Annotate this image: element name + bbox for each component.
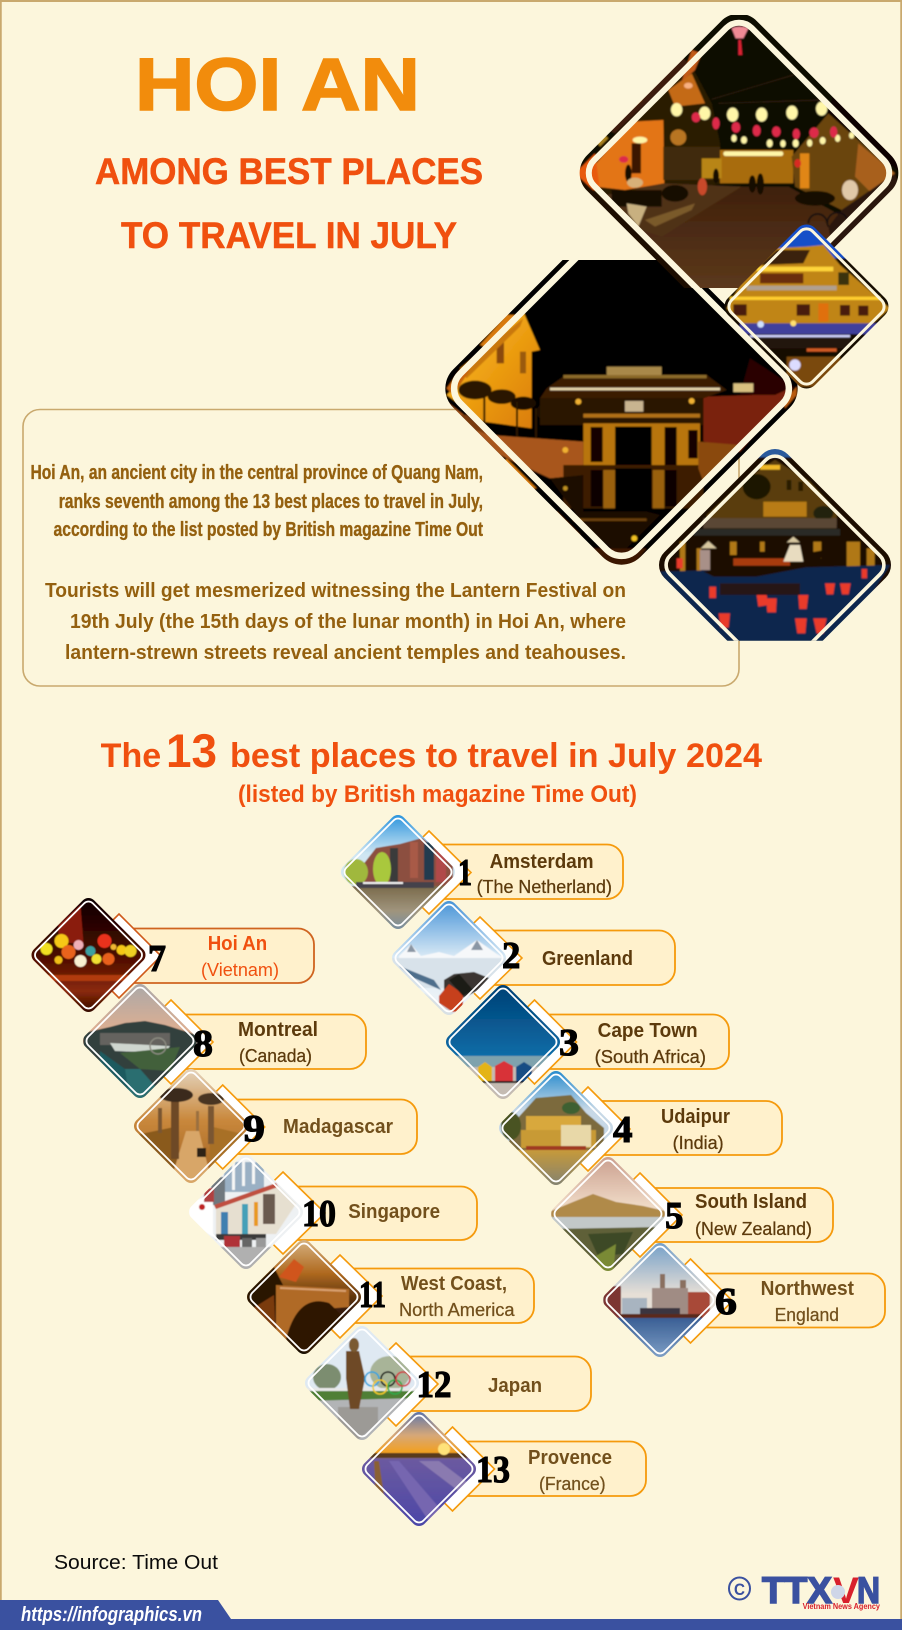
- photo: Montreal skyline: [80, 981, 200, 1101]
- label box: [530, 1014, 729, 1069]
- rank number: 5: [665, 1195, 684, 1237]
- logo: TTXVN Vietnam News Agency: N: [857, 1570, 880, 1611]
- country: (South Africa): [595, 1047, 706, 1067]
- copyright mark: [729, 1578, 750, 1600]
- item 3: Cape Town: [443, 982, 729, 1107]
- section heading: best places to travel in July 2024: [230, 737, 762, 775]
- label box: [635, 1188, 833, 1242]
- rank number: 3: [559, 1022, 579, 1064]
- photo: Cape Town beach huts: [446, 985, 560, 1099]
- section heading: 13: [166, 724, 217, 777]
- photo: statue and Olympic rings: [302, 1323, 422, 1443]
- place name: Montreal: [238, 1019, 318, 1041]
- globe: [831, 1585, 845, 1599]
- label box: [335, 1268, 534, 1323]
- copyright mark: C: [734, 1580, 745, 1599]
- accent diamond: [181, 1085, 265, 1169]
- photo: Singapore shophouses: [186, 1152, 306, 1272]
- logo: TTXVN Vietnam News Agency: [729, 1570, 880, 1611]
- accent diamond: [298, 1255, 382, 1338]
- place name: Hoi An: [208, 933, 267, 955]
- label box: [583, 1101, 782, 1155]
- label box: [114, 928, 314, 983]
- body text: first paragraph: ranks seventh among the 13 best places to travel in July,: [59, 491, 483, 513]
- photo: Amsterdam canal: [341, 815, 455, 929]
- photo: Liverpool waterfront: [603, 1243, 716, 1357]
- accent diamond: [354, 1343, 438, 1426]
- photo: Bixby bridge: [244, 1237, 364, 1357]
- photo: Japanese covered bridge at night: [440, 255, 807, 575]
- subtitle line 1: AMONG BEST PLACES: [95, 151, 483, 192]
- item 13: Provence: [359, 1409, 646, 1529]
- item 2: Greenland: [389, 898, 675, 1018]
- region: North America: [399, 1300, 515, 1320]
- country: (Vietnam): [201, 960, 279, 980]
- item 10: Singapore: [186, 1152, 477, 1272]
- footer band: [0, 1600, 902, 1630]
- accent diamond: [598, 1173, 682, 1257]
- country: (India): [673, 1133, 724, 1153]
- title: HOI AN: HOI AN: [135, 43, 420, 126]
- item 9: Madagascar: [131, 1066, 417, 1186]
- photo: lavender field: [359, 1409, 479, 1529]
- item 11: West Coast: [244, 1237, 534, 1357]
- accent diamond: [648, 1259, 732, 1343]
- photo: lantern street at night: [580, 15, 898, 288]
- label box: [424, 844, 623, 899]
- place name: Greenland: [542, 948, 633, 970]
- region: England: [775, 1305, 839, 1325]
- footer URL: https://infographics.vn: [21, 1604, 202, 1626]
- ring: yellow building frame: [725, 225, 888, 388]
- rank number: 13: [476, 1449, 510, 1491]
- label box: [391, 1356, 591, 1411]
- item 12: Japan: [302, 1323, 591, 1443]
- rank number: 11: [359, 1274, 386, 1316]
- section heading: [101, 724, 762, 808]
- panel: intro text box: [23, 410, 739, 686]
- rank number: 1: [458, 852, 472, 894]
- agency name: Vietnam News Agency: [803, 1601, 880, 1611]
- place name: Japan: [488, 1375, 542, 1397]
- rank number: 10: [302, 1193, 336, 1235]
- body text: first paragraph: according to the list posted by British magazine Time Out: [54, 519, 483, 541]
- item 7: Hoi An: [28, 895, 314, 1015]
- accent diamond: [129, 1000, 213, 1084]
- place name: Udaipur: [661, 1106, 730, 1128]
- photo: baobab trees: [134, 1069, 247, 1183]
- rank number: 8: [193, 1023, 213, 1065]
- item 1: Amsterdam: [338, 812, 623, 936]
- photo: Greenland coast: [389, 898, 509, 1018]
- rank number: 9: [243, 1108, 265, 1150]
- label box: [686, 1274, 885, 1328]
- place name: Cape Town: [598, 1020, 698, 1042]
- rank number: 7: [148, 938, 166, 980]
- ring: bridge photo frame: [450, 260, 792, 560]
- place name: Northwest: [761, 1278, 854, 1300]
- accent diamond: [492, 1000, 576, 1084]
- label box: [448, 1442, 646, 1496]
- rank number: 12: [416, 1364, 452, 1406]
- label box: [218, 1100, 417, 1154]
- source note: Source: Time Out: [54, 1551, 218, 1574]
- body text: second paragraph: Tourists will get mesmerized witnessing the Lantern Festival on: [45, 580, 626, 602]
- photo: Udaipur palace: [499, 1071, 613, 1185]
- accent diamond: [241, 1172, 325, 1254]
- place name: Amsterdam: [490, 851, 594, 873]
- body text: second paragraph: 19th July (the 15th days of the lunar month) in Hoi An, where: [70, 611, 626, 633]
- country: (The Netherland): [477, 877, 612, 897]
- label box: [166, 1014, 366, 1069]
- rank number: 4: [613, 1109, 632, 1151]
- photo: lanterns: [28, 895, 148, 1015]
- place name: Provence: [528, 1447, 612, 1469]
- place name: South Island: [695, 1191, 807, 1213]
- item 4: Udaipur: [496, 1068, 782, 1190]
- photo: South Island bay: [548, 1154, 668, 1274]
- country: (France): [539, 1474, 606, 1494]
- section heading: The: [101, 737, 161, 775]
- label box: [475, 930, 675, 985]
- photo: yellow riverside building: [720, 222, 893, 392]
- country: (Canada): [239, 1046, 312, 1066]
- country: (New Zealand): [695, 1219, 812, 1239]
- body text: first paragraph: Hoi An, an ancient city in the central province of Quang Nam,: [30, 462, 483, 484]
- body text: second paragraph: [45, 580, 626, 664]
- accent diamond: [546, 1087, 630, 1171]
- wordmark: TTX: [762, 1570, 832, 1611]
- place name: Madagascar: [283, 1116, 393, 1138]
- accent diamond: [387, 831, 471, 914]
- logo: TTXVN Vietnam News Agency: V: [833, 1570, 859, 1611]
- item 5: South Island: [548, 1154, 833, 1274]
- item 8: Montreal: [80, 981, 366, 1101]
- item 6: Northwest England: [600, 1240, 885, 1363]
- section subheading: (listed by British magazine Time Out): [238, 781, 637, 808]
- body text: second paragraph: lantern-strewn streets reveal ancient temples and teahouses.: [65, 642, 626, 664]
- accent diamond: [77, 914, 161, 998]
- place name: West Coast,: [401, 1273, 507, 1295]
- place name: Singapore: [348, 1201, 440, 1223]
- rank number: 6: [715, 1281, 737, 1323]
- accent diamond: [438, 917, 522, 999]
- title: [95, 43, 483, 256]
- subtitle line 2: TO TRAVEL IN JULY: [121, 215, 457, 256]
- accent diamond: [410, 1427, 494, 1511]
- rank number: 2: [502, 935, 520, 977]
- label box: [278, 1186, 477, 1240]
- body text: first paragraph: [30, 462, 483, 541]
- photo: lantern boats on the river: [659, 449, 891, 641]
